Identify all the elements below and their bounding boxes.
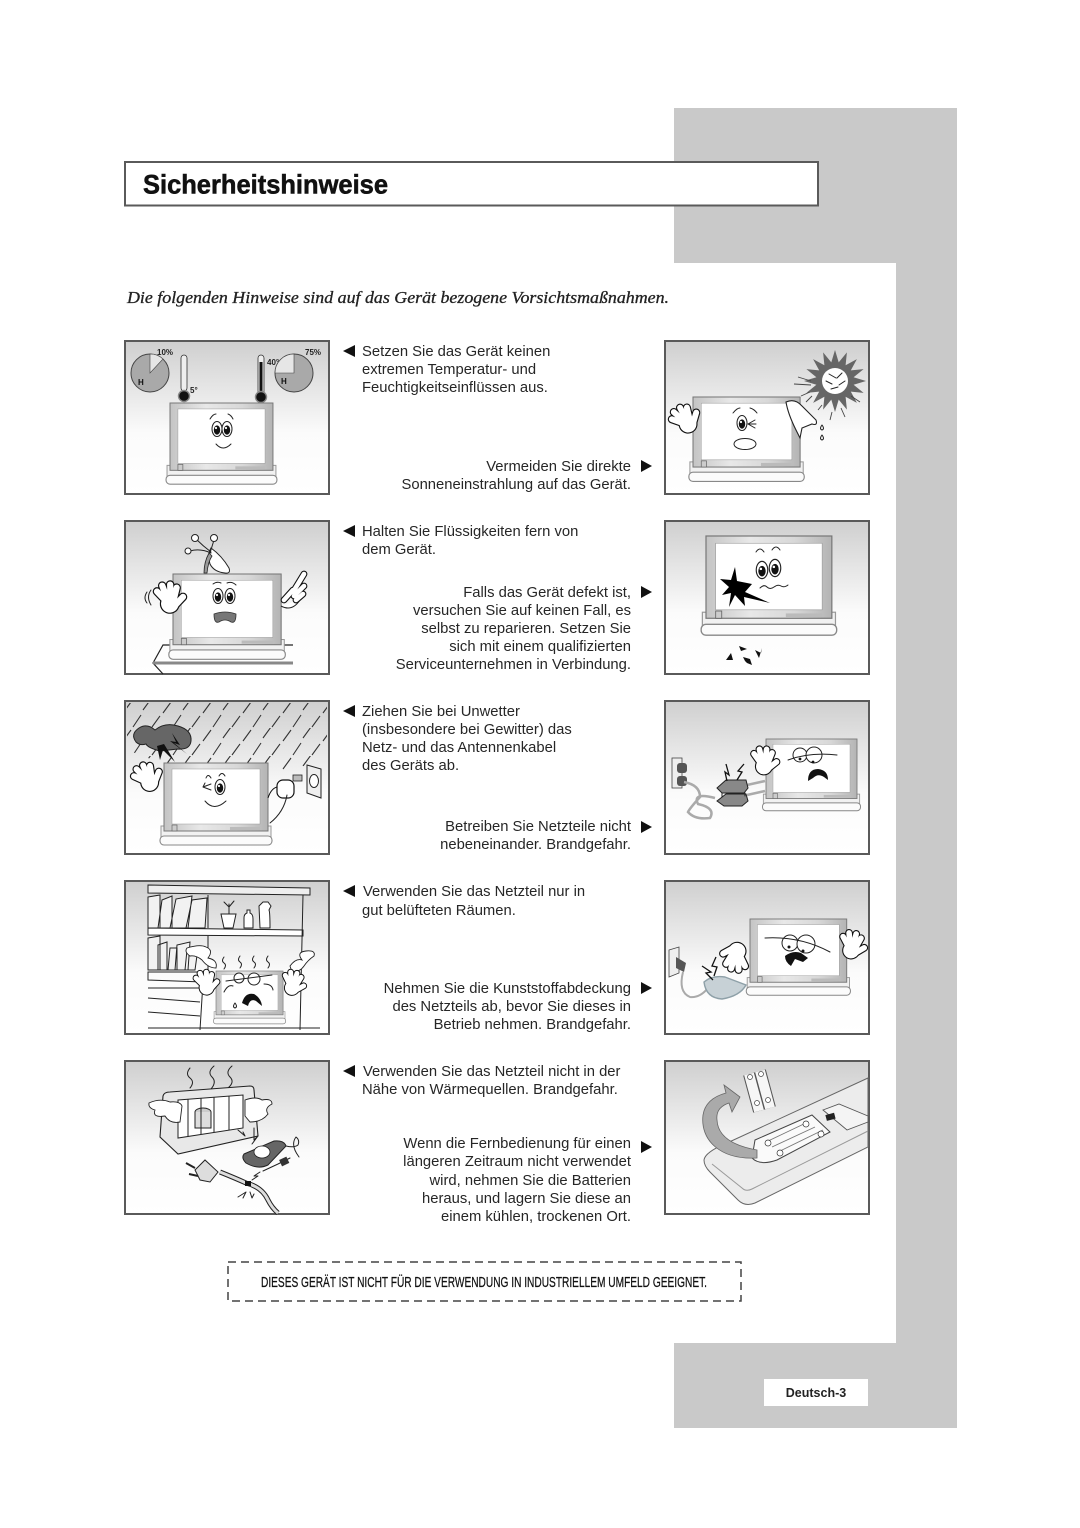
- text: heat sources warning: [362, 1064, 621, 1098]
- smoke right: [290, 951, 314, 972]
- icon: storm cloud with lightning: [134, 725, 191, 762]
- icon: wall outlet with plug: [669, 947, 686, 977]
- icon: battery compartment: [752, 1115, 830, 1163]
- text: temperature warning: extremen Temperatur- und: [362, 362, 536, 378]
- icon: remote control: [704, 1078, 868, 1204]
- television with winking face: [160, 763, 272, 845]
- text: remote batteries advice: heraus, und lagern Sie diese an: [422, 1191, 631, 1207]
- pie chart: 10% humidity: [131, 348, 173, 392]
- text: plastic cover warning: des Netzteils ab, bevor Sie dieses in: [392, 999, 631, 1015]
- text: plastic cover warning: [384, 981, 631, 1033]
- title box: [125, 162, 818, 206]
- icon: covered adapter: [704, 977, 746, 999]
- right arrow 5: [641, 1141, 652, 1153]
- text: direct sunlight warning: [401, 459, 631, 493]
- panel: heater with adapter: [125, 1061, 329, 1214]
- pie chart: 75% humidity: [275, 348, 321, 392]
- text: temperature warning: Setzen Sie das Gerät keinen: [362, 344, 550, 360]
- icon: fist holding plug: [268, 775, 302, 823]
- pie chart: 10% humidity: 10%: [157, 348, 173, 357]
- television with happy face: [166, 403, 277, 484]
- icon: heater: [160, 1086, 258, 1154]
- icon: stacked adapters: [717, 780, 748, 806]
- icon: droplets: [820, 425, 824, 440]
- text: adapters warning: [440, 819, 631, 853]
- cord: [682, 972, 708, 997]
- panel: direct sunlight: [665, 341, 869, 494]
- pie chart: 75% humidity: H: [281, 377, 287, 386]
- panel: keep liquids away: [125, 521, 329, 674]
- cords: [684, 781, 765, 818]
- icon: left hand waving: [156, 583, 185, 615]
- thermometer: 5 degrees: [178, 355, 198, 402]
- text: ventilation warning: [362, 884, 585, 919]
- icon: sparks: [702, 957, 717, 980]
- television with squinting face: [689, 397, 804, 481]
- text: repair warning: Falls das Gerät defekt ist,: [463, 585, 631, 601]
- left arrow 4: [343, 885, 355, 897]
- icon: sparks: [725, 764, 744, 781]
- pie chart: 75% humidity: 75%: [305, 348, 321, 357]
- text: storm warning: des Geräts ab.: [362, 758, 459, 774]
- panel: stacked adapters: [665, 701, 869, 854]
- thermometer: 5 degrees: 5°: [190, 386, 198, 395]
- arrow: remove batteries: [703, 1085, 757, 1158]
- text: repair warning: [396, 585, 631, 673]
- books upper shelf: [148, 895, 207, 928]
- page number label: Deutsch-3: [786, 1386, 846, 1400]
- table: [153, 645, 293, 674]
- smoke left and right: [149, 1098, 272, 1122]
- text: ventilation warning: Verwenden Sie das Netzteil nur in: [363, 884, 585, 900]
- television with alarmed face: [746, 919, 850, 995]
- page number label: [764, 1379, 868, 1406]
- text: liquids warning: [362, 524, 578, 558]
- icon: damaged adapter: [243, 1137, 299, 1171]
- smoke left: [186, 946, 216, 968]
- text: plastic cover warning: Nehmen Sie die Kunststoffabdeckung: [384, 981, 631, 997]
- text: storm warning: [362, 704, 572, 774]
- text: temperature warning: [362, 344, 550, 396]
- left arrow 3: [343, 705, 355, 717]
- text: direct sunlight warning: Vermeiden Sie direkte: [486, 459, 631, 475]
- text: adapters warning: Betreiben Sie Netzteile nicht: [445, 819, 631, 835]
- thermometer: 40 degrees: 40°: [267, 358, 279, 367]
- text: direct sunlight warning: Sonneneinstrahlung auf das Gerät.: [401, 477, 631, 493]
- icon: broken shards: [726, 646, 762, 665]
- subtitle: Die folgenden Hinweise sind auf das Gerät bezogene Vorsichtsmaßnahmen.: [126, 288, 669, 307]
- icon: cloth shading the screen: [786, 401, 816, 438]
- text: plastic cover warning: Betrieb nehmen. Brandgefahr.: [434, 1017, 631, 1033]
- text: liquids warning: dem Gerät.: [362, 542, 436, 558]
- warning box: dashed notice: [228, 1262, 741, 1301]
- shelf structure: [148, 885, 320, 1030]
- icon: left hand: [132, 760, 166, 796]
- television with crying face: [213, 971, 286, 1024]
- panel: broken television: [665, 521, 869, 674]
- books lower shelf: [148, 936, 198, 970]
- icon: angry sun: [794, 350, 866, 420]
- icon: right hand pointing: [281, 574, 304, 608]
- panel: blocked adapter: [665, 881, 869, 1034]
- heat squiggles: [188, 1066, 232, 1089]
- pie chart: 10% humidity: H: [138, 378, 144, 387]
- text: repair warning: Serviceunternehmen in Verbindung.: [396, 657, 631, 673]
- icon: raised hand: [840, 932, 866, 961]
- television with alarmed face: [762, 739, 860, 811]
- right arrow 4: [641, 982, 652, 994]
- text: repair warning: versuchen Sie auf keinen Fall, es: [413, 603, 631, 619]
- text: adapters warning: nebeneinander. Brandgefahr.: [440, 837, 631, 853]
- panel: television in closed shelf: [125, 881, 329, 1034]
- title box: Sicherheitshinweise: [143, 170, 388, 200]
- text: storm warning: (insbesondere bei Gewitter) das: [362, 722, 572, 738]
- left arrow 5: [343, 1065, 355, 1077]
- icon: crack star burst: [720, 567, 770, 607]
- thermometer: 40 degrees: [256, 355, 279, 402]
- heat squiggles: [222, 956, 270, 969]
- text: remote batteries advice: [403, 1136, 631, 1225]
- warning box: dashed notice: DIESES GERÄT IST NICHT FÜR DIE VERWENDUNG IN INDUSTRIELLEM UMFELD GEEIGNET.: [261, 1273, 707, 1291]
- icon: hand pointing at adapter: [721, 940, 749, 971]
- television with cracked screen: [701, 536, 837, 635]
- text: storm warning: Ziehen Sie bei Unwetter: [362, 704, 520, 720]
- text: remote batteries advice: einem kühlen, trockenen Ort.: [441, 1209, 631, 1225]
- icons: raised hands: [195, 971, 306, 998]
- icon: raised hand: [669, 402, 704, 438]
- right arrow 1: [641, 460, 652, 472]
- text: liquids warning: Halten Sie Flüssigkeiten fern von: [362, 524, 578, 540]
- right arrow 2: [641, 586, 652, 598]
- icon: wall outlet: [307, 765, 321, 798]
- grey page background band: [674, 108, 957, 1428]
- text: temperature warning: Feuchtigkeitseinflüssen aus.: [362, 380, 548, 396]
- panel: temperature and humidity: [125, 341, 329, 494]
- left arrow 2: [343, 525, 355, 537]
- text: heat sources warning: Verwenden Sie das Netzteil nicht in der: [363, 1064, 621, 1080]
- right arrow 3: [641, 821, 652, 833]
- icon: wall outlet with plugs: [672, 758, 687, 788]
- left arrow 1: [343, 345, 355, 357]
- text: storm warning: Netz- und das Antennenkabel: [362, 740, 556, 756]
- plant and bottles: [221, 901, 271, 928]
- text: heat sources warning: Nähe von Wärmequellen. Brandgefahr.: [362, 1082, 618, 1098]
- icon: two batteries: [748, 1071, 770, 1111]
- wave marks: [145, 590, 151, 605]
- text: remote batteries advice: Wenn die Fernbedienung für einen: [403, 1136, 631, 1152]
- rain: [127, 703, 327, 772]
- text: remote batteries advice: längeren Zeitraum nicht verwendet: [403, 1154, 631, 1170]
- television with worried face: [153, 574, 293, 663]
- text: repair warning: sich mit einem qualifizierten: [449, 639, 631, 655]
- icon: tipping vase with flowers: [185, 534, 230, 573]
- text: ventilation warning: gut belüfteten Räumen.: [362, 903, 516, 919]
- panel: thunderstorm unplug: [125, 701, 329, 854]
- text: repair warning: selbst zu reparieren. Setzen Sie: [421, 621, 631, 637]
- icon: sparks: [238, 1128, 260, 1198]
- panel: remote control batteries: [665, 1061, 869, 1214]
- text: remote batteries advice: wird, nehmen Sie die Batterien: [428, 1173, 631, 1189]
- icon: plug with damaged cord: [186, 1160, 278, 1213]
- icon: raised hand: [754, 749, 776, 775]
